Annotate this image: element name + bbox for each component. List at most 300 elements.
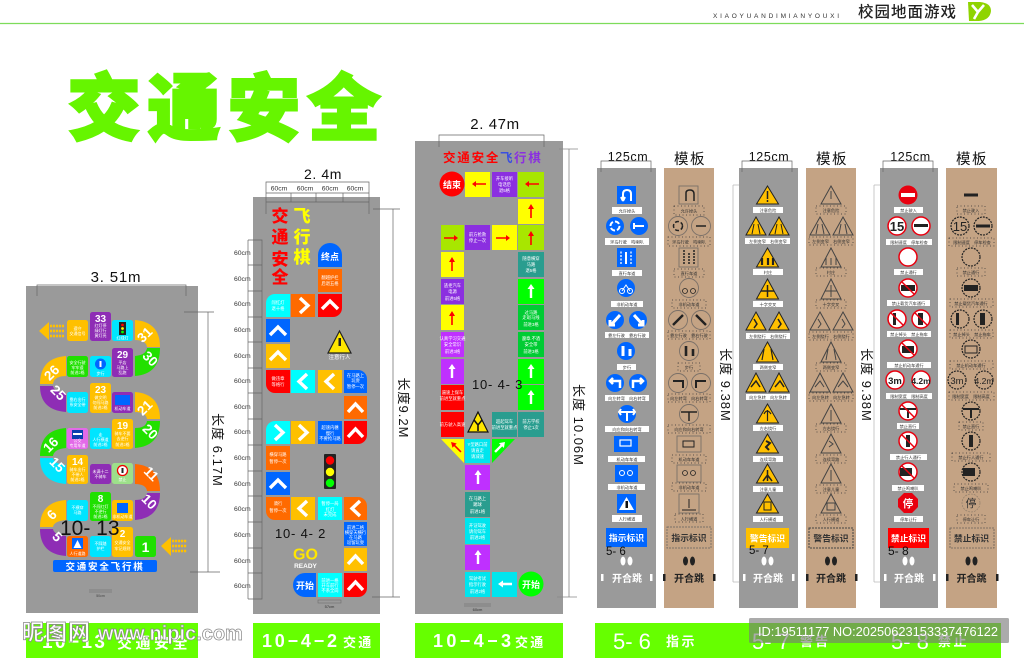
caption dots: [809, 206, 853, 523]
dimension 3.51m: 长度 6.17M: [210, 413, 225, 487]
left ruler: 60cm: [234, 378, 251, 385]
board cells: 请直走: [471, 447, 485, 454]
panel: 5-7 warning signs: 左侧绕行 右侧绕行: [749, 333, 787, 340]
panel: 5-7 warning signs: 左右绕行: [760, 425, 776, 432]
code label: 5- 6: [606, 546, 626, 558]
captions: 人行横道: [823, 516, 840, 523]
stencil triangles: [809, 186, 853, 548]
stencil glyphs: 4.2m: [975, 376, 993, 386]
board cells: 驾驶考试: [469, 575, 487, 582]
board cells: 不逆行: [94, 508, 106, 514]
board cells: 在马路: [349, 534, 363, 541]
top dimension: [439, 116, 544, 147]
panel: 5-6 indication signs: 非机动车道: [617, 484, 638, 491]
left ruler: 60cm: [234, 532, 251, 539]
no entry: [898, 186, 918, 204]
panel: 5-8 prohibition signs: 禁止行人通行: [896, 454, 921, 461]
board cells: 马路: [527, 261, 536, 268]
header: XIAOYUANDIMIANYOUXI: [713, 13, 842, 20]
board cells: 安全行驶: [70, 359, 86, 365]
captions: 禁止驶入: [963, 207, 980, 214]
captions: [886, 207, 932, 522]
captions: 步行: [685, 364, 693, 371]
dimension 3.51m: [37, 269, 225, 572]
board cells: [266, 243, 367, 597]
board cells: 未完成: [324, 511, 337, 518]
board cells: 超速内穗: [321, 424, 339, 431]
board cells: 请减速: [471, 453, 485, 460]
left ruler: 60cm: [234, 250, 251, 257]
board cells: 暂停一次: [269, 507, 287, 514]
board cells: 过马路: [525, 309, 538, 316]
left ruler: 60cm: [234, 429, 251, 436]
left ruler: 60cm: [234, 327, 251, 334]
board cells: 不系全岗: [321, 587, 339, 594]
board cells: 开车前行: [321, 582, 339, 589]
captions: 村庄: [827, 269, 835, 276]
icon: traffic light: [324, 454, 336, 489]
panel: 5-7 stencil: [806, 150, 858, 608]
stencil circles: [948, 217, 994, 548]
board cells: 骑行: [274, 500, 283, 507]
board cells: 33: [95, 314, 106, 325]
heading: 模板: [674, 150, 706, 168]
captions: 非机动车道: [679, 301, 700, 308]
board cells: 不骑车: [94, 473, 106, 479]
code label: 10- 13: [60, 517, 120, 540]
board cells: 去逆行: [116, 435, 128, 441]
bottom label text: 5- 7: [752, 629, 790, 654]
panel: 5-8 prohibition signs: [880, 150, 938, 608]
watermark: [22, 620, 243, 645]
width note: [89, 590, 112, 598]
board cells: 系安全带: [70, 401, 86, 407]
board cells: 做违章: [272, 375, 285, 382]
board cells: 闯红灯: [272, 299, 285, 306]
board cells: 前方驶入高速: [440, 421, 466, 428]
board cells: 1: [142, 539, 150, 555]
blue signs: [606, 186, 648, 513]
board cells: 14: [72, 457, 83, 468]
captions: 禁止掉头 禁止拖车: [953, 331, 991, 338]
bottom label text: 5- 6: [613, 629, 651, 654]
width note: [318, 600, 341, 609]
panel: 10-13 board: [26, 269, 225, 613]
width dimension: [883, 150, 933, 172]
board cells: 前进3格: [523, 321, 539, 328]
board cells: 电源: [448, 288, 457, 295]
board cells: 走: [98, 431, 102, 437]
prohibition slashes: [891, 282, 927, 478]
board cells: 2: [120, 529, 126, 540]
board cells: 非机动车道: [112, 513, 132, 519]
captions: 两侧变窄: [823, 364, 839, 371]
caption dots: [949, 206, 994, 523]
panel: 5-7 warning signs: 两侧变窄: [760, 364, 776, 371]
board cells: 5: [49, 529, 65, 545]
board cells: 人行横道: [92, 436, 108, 442]
panel: 5-7 warning signs: 向左急转 向左急转: [749, 394, 787, 401]
round signs: [886, 217, 930, 481]
captions: [812, 207, 850, 523]
board heading: 安: [272, 249, 288, 269]
stop sign: [898, 493, 918, 513]
board cells: 后退五格: [321, 280, 339, 287]
width note: [464, 604, 491, 612]
panel: 10-4-2 board: [234, 166, 411, 614]
board cells: 开证驾驶: [469, 522, 487, 529]
category text: 禁止标识: [954, 532, 989, 544]
board cells: 未满十二: [92, 468, 108, 474]
left ruler: 60cm: [234, 558, 251, 565]
panel: 5-8 prohibition signs: 禁止鸣喇叭: [898, 485, 919, 492]
panel: 5-6 indication signs: 非机动车道: [617, 301, 638, 308]
footprints and jump: [884, 556, 936, 585]
panel: 5-7 warning signs: 左侧变窄 右侧变窄: [749, 238, 787, 245]
board cells: 15: [47, 454, 68, 476]
board cells: 29: [117, 350, 128, 361]
category box: [888, 528, 929, 548]
board cells: 红绿灯: [116, 334, 128, 340]
panel: 5-7 warning signs: [739, 150, 798, 608]
dimension: 5-7 height: [718, 185, 745, 582]
board cells: 前进至就重点: [492, 424, 518, 431]
panel: 5-6 indication signs: 机动车车道: [617, 456, 638, 463]
panel: 10-4-3 board: [415, 116, 586, 614]
board cells: 30: [140, 348, 161, 369]
board cells: 退5格: [526, 267, 537, 274]
board cells: 不横穿: [72, 504, 84, 510]
category box: 禁止标识: [891, 532, 926, 544]
left ruler: 60cm: [234, 301, 251, 308]
board cells: 请勿驾车: [469, 528, 487, 535]
board cells: 前方抢救: [469, 231, 487, 238]
board cells: 26: [41, 362, 63, 383]
board cells: 勿闯马路: [92, 399, 108, 405]
board cells: 前方学校: [522, 418, 540, 425]
board cells: 开始: [296, 580, 314, 591]
category box: 警告标识: [750, 532, 785, 544]
footprints and jump: [806, 556, 858, 585]
panel: 5-7 warning signs: 人行横道: [760, 516, 777, 523]
board cells: 开始: [522, 579, 540, 590]
board cells: 指示行驶: [469, 581, 487, 588]
board cells: 前进1格: [470, 508, 486, 515]
right dimension: [557, 149, 586, 597]
board heading: 棋: [294, 247, 310, 267]
board heading: 飞: [500, 151, 514, 165]
board cells: 遵章.不酒: [522, 335, 541, 342]
width dimension: 125cm: [608, 150, 648, 164]
captions: 人行横道: [681, 516, 698, 522]
right dimension: 长度 10.06M: [571, 384, 586, 466]
board cells: 前进3格: [445, 348, 461, 355]
footprints and jump: [743, 556, 794, 585]
caption dots: [668, 206, 710, 522]
captions: 禁止直行: [963, 423, 979, 430]
board cells: 牢牢遵: [72, 364, 84, 370]
width note: 60cm: [473, 607, 483, 612]
arrow: start: [161, 537, 187, 556]
top ruler: 2. 4m: [304, 166, 342, 182]
board cells: 遵守: [74, 325, 82, 331]
captions: [670, 208, 709, 522]
panel: 5-6 indication signs: 环岛行驶 鸣喇叭: [610, 238, 645, 246]
bottom label text: 指示: [666, 634, 697, 649]
footprints and jump: 开合跳: [816, 572, 846, 585]
panel: 5-7 warning signs: 注意危险: [760, 207, 777, 214]
board cells: 25: [48, 382, 69, 404]
stencil glyphs: 停: [966, 496, 976, 510]
board cells: 在马路上: [469, 495, 487, 502]
board heading: [272, 206, 310, 287]
board cells: 逗留玩耍: [347, 539, 365, 546]
width dimension: 125cm: [890, 150, 931, 164]
bottom label text: [42, 629, 969, 654]
panel: 5-6 indication signs: 直行车道: [619, 270, 636, 277]
banner: 交通安全飞行棋: [65, 561, 145, 573]
board heading: 交通安全: [443, 150, 500, 165]
top dimension: 2. 47m: [470, 116, 520, 133]
captions: 环岛行驶 鸣喇叭: [672, 238, 707, 246]
category text: 指示标识: [671, 532, 707, 543]
captions: 靠左行驶 靠右行驶: [670, 332, 709, 339]
board heading: 交: [272, 206, 288, 226]
board cells: 横穿马路: [269, 451, 287, 458]
board cells: 不带人: [72, 472, 84, 477]
dimension 3.51m: 3. 51m: [91, 269, 141, 286]
board cells: 等格行: [272, 381, 285, 388]
captions: 注意儿童: [823, 486, 839, 493]
board cells: 8: [98, 494, 104, 505]
triangle glyphs: [751, 191, 784, 510]
dimension: 5-7 height: 长度 9.38M: [718, 348, 733, 422]
heading: 模板: [816, 150, 848, 168]
board cells: 前进3格: [523, 348, 539, 355]
captions: 左侧变窄 右侧变窄: [812, 238, 850, 245]
board cells: 踢球: [473, 501, 482, 508]
board cells: 暂停一局: [321, 500, 339, 507]
panel: 5-6 indication signs: 向左和向右转弯: [612, 426, 642, 433]
bottom label text: 警告: [800, 634, 830, 649]
board cells: 23: [95, 385, 106, 396]
board cells: 前进2格: [70, 476, 85, 482]
board cells: 前进2格: [115, 441, 130, 447]
left ruler: 60cm: [234, 353, 251, 360]
icon: pedestrian warning: [328, 331, 351, 361]
board cells: 玩耍: [351, 378, 360, 384]
captions: 限制宽度 限制高度: [952, 393, 991, 400]
footprints and jump: 开合跳: [894, 572, 924, 585]
board cells: [440, 172, 544, 597]
footprints and jump: [663, 556, 716, 585]
board cells: 不要抢马路: [319, 435, 341, 442]
sign glyphs: [610, 190, 644, 476]
bottom label text: 10−4−2: [262, 631, 337, 651]
board cells: 走斑马线: [522, 314, 540, 321]
code label: 10- 4- 3: [472, 377, 523, 392]
category box: [746, 528, 789, 548]
board cells: 开车接听: [496, 175, 514, 182]
watermark: www.nipic.com: [97, 623, 243, 645]
board cells: 马路上: [116, 364, 128, 370]
board cells: 10: [139, 491, 160, 512]
stencil glyphs: [950, 194, 993, 510]
left ruler: [234, 240, 262, 599]
captions: [745, 207, 790, 522]
bottom label text: 交通安全: [117, 634, 191, 652]
sign captions: [605, 207, 649, 522]
stop sign: 停: [903, 497, 914, 510]
bottom label text: 5- 8: [891, 629, 929, 654]
board cells: 在马路上: [347, 372, 365, 379]
board cells: 靠右出行: [70, 396, 86, 402]
captions: 直行车道: [681, 270, 698, 277]
bottom label text: 交通: [343, 635, 373, 650]
yellow triangles: [746, 186, 789, 513]
footprints and jump: [946, 556, 998, 585]
captions: 左侧绕行 右侧绕行: [812, 333, 850, 340]
dimension: 5-8 height: [859, 185, 884, 582]
board cells: 公交: [74, 437, 82, 443]
board cells: 交通信号: [70, 330, 86, 336]
icon: pedestrian warning: 注意行人: [328, 353, 351, 361]
GO READY: GO: [293, 546, 318, 564]
sign glyphs: 3m: [888, 376, 902, 387]
panel: 5-6 indication signs: 人行横道: [619, 516, 636, 522]
panel: 5-6 stencil: [663, 150, 716, 608]
board cells: 终点: [321, 251, 339, 262]
board cells: 退5格: [499, 187, 511, 194]
board cells: 20: [140, 421, 161, 442]
top ruler: [266, 166, 369, 214]
board heading: 全: [272, 267, 288, 287]
panel: 5-8 prohibition signs: 禁止通行: [900, 269, 917, 276]
board cells: 前进2格: [93, 441, 108, 447]
sign glyphs: [888, 219, 931, 476]
GO READY: READY: [294, 563, 318, 570]
board cells: 16: [40, 434, 62, 455]
sign glyphs: 15: [890, 219, 904, 234]
board cells: 做文明: [94, 394, 106, 400]
board heading: 飞: [294, 207, 310, 226]
board cells: 6: [44, 507, 60, 523]
left ruler: 60cm: [234, 276, 251, 283]
board heading: 通: [272, 228, 288, 247]
board cells: 21: [134, 397, 156, 418]
captions: 注意危险: [823, 207, 840, 214]
captions: 禁止鸣喇叭: [961, 485, 982, 492]
board cells: 红灯: [326, 506, 335, 513]
board cells: 超起驾车: [496, 418, 514, 425]
board cells: 暂停一次: [269, 458, 287, 465]
board cells: 护栏: [96, 545, 104, 551]
board heading: [443, 150, 543, 165]
bottom label text: 10−4−3: [433, 631, 511, 651]
top ruler: 60cm: [322, 186, 339, 192]
width note: 50cm: [96, 594, 105, 598]
board cells: 前进2格: [470, 534, 486, 541]
board cells: 机动车道: [114, 405, 130, 411]
panel: 5-8 prohibition signs: 停车让行: [900, 516, 917, 523]
left ruler: 60cm: [234, 455, 251, 462]
captions: 向左和向右转弯: [674, 426, 704, 433]
captions: 禁止载货汽车通行: [954, 300, 988, 307]
width dimension: [601, 150, 651, 172]
stencil glyphs: 15: [953, 219, 967, 234]
right dimension: [372, 209, 411, 597]
top ruler: 60cm: [297, 186, 314, 192]
board cells: 骑车出行: [70, 466, 86, 472]
board cells: 认真学习交通: [440, 335, 466, 342]
stencil glyphs: 3m: [950, 376, 964, 387]
heading: 模板: [956, 150, 988, 168]
captions: [952, 207, 992, 523]
captions: 限制速度 停车检查: [953, 239, 992, 246]
header: [0, 2, 1024, 24]
captions: 十字交叉: [823, 301, 840, 308]
footprints and jump: [601, 556, 652, 585]
board cells: 前进2格: [470, 588, 486, 595]
left ruler: 60cm: [234, 583, 251, 590]
board cells: 前进2格: [93, 513, 108, 519]
board cells: 翻越护栏: [321, 274, 339, 281]
board cells: 人行道路: [70, 550, 86, 556]
board cells: 平店: [118, 359, 126, 365]
icon: fork warning: [468, 412, 488, 432]
board cells: Y型路口前: [467, 441, 488, 448]
ID strip: ID:19511177 NO:20250623153337476122: [758, 624, 998, 639]
board cells: 逼速上保车: [442, 389, 464, 396]
width note: 57cm: [325, 604, 335, 609]
board heading: 行: [294, 227, 310, 247]
code label: 5- 8: [888, 544, 909, 558]
captions: 机动车车道: [679, 456, 700, 463]
board cells: 乱跑: [118, 369, 126, 375]
board cells: 逃拒汽车: [444, 282, 462, 289]
board cells: 步行: [96, 370, 104, 376]
captions: 允许掉头: [681, 208, 697, 214]
left ruler: 60cm: [234, 506, 251, 513]
footprints and jump: 开合跳: [612, 572, 642, 585]
top ruler: 60cm: [347, 186, 364, 192]
panel: 5-8 prohibition signs: 禁止载货汽车通行: [892, 300, 925, 307]
sign glyphs: 4.2m: [911, 376, 931, 386]
board cells: 专用车道: [70, 442, 86, 448]
panel: 5-7 warning signs: 连续弯路: [760, 456, 777, 463]
board cells: 牢记规则: [114, 545, 130, 551]
category box: [606, 528, 647, 547]
stencil outlines: [667, 186, 711, 548]
width dimension: 125cm: [749, 150, 789, 164]
panel: 5-8 prohibition signs: 禁止直行: [900, 423, 916, 430]
board cells: 马路: [74, 509, 82, 515]
board cells: 前进二格: [347, 524, 365, 531]
category text: 警告标识: [813, 532, 849, 544]
board cells: 横穿天横行: [345, 529, 367, 536]
footprints and jump: 开合跳: [753, 572, 783, 585]
dimension: 5-8 height: 长度 9.38M: [859, 348, 874, 422]
banner: [53, 560, 157, 573]
left ruler: 60cm: [234, 481, 251, 488]
panel: 5-6 indication signs: 步行: [623, 364, 631, 371]
captions: 左右绕行: [823, 425, 839, 432]
code label: 10- 4- 2: [275, 526, 326, 541]
icon: crossing: [619, 497, 634, 510]
captions: 禁止行人通行: [958, 454, 984, 461]
captions: 禁止机动车通行: [956, 362, 986, 369]
header: 校园地面游戏: [858, 3, 957, 21]
